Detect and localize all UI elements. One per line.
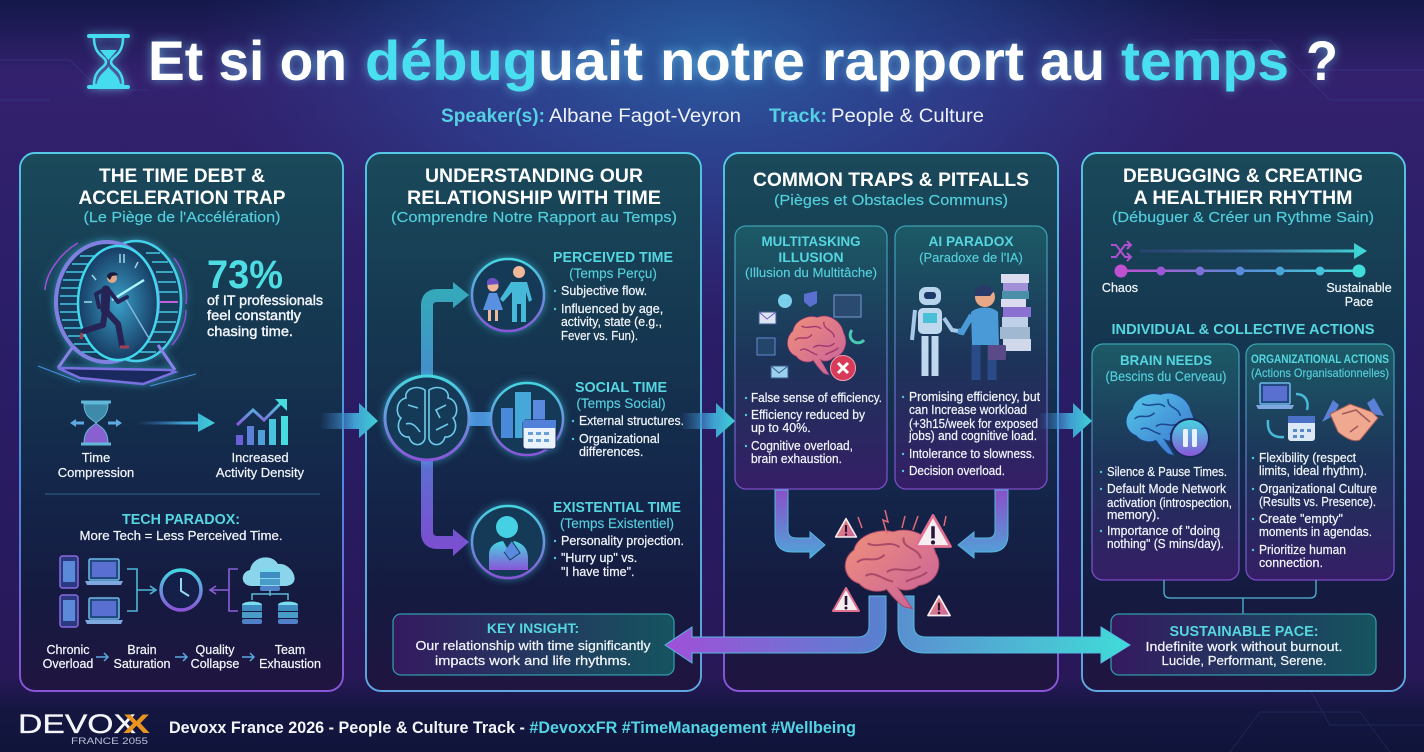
panel: debugging — [1082, 153, 1405, 691]
footer — [18, 709, 856, 747]
bullets: limits, ideal rhythm). — [1259, 464, 1367, 478]
process chain: Collapse — [191, 657, 239, 671]
icon: child and adult — [472, 259, 544, 331]
speaker line: People & Culture — [831, 106, 984, 127]
title: uait — [538, 29, 643, 92]
bullets: Flexibility (respect — [1259, 451, 1357, 465]
heading: (Le Piège de l'Accélération) — [84, 209, 281, 226]
speaker line — [441, 106, 984, 127]
bullets: nothing" (S mins/day). — [1107, 537, 1224, 551]
icon: brain circle — [385, 376, 469, 460]
text: perceived time — [553, 249, 673, 343]
icon: city calendar — [491, 383, 563, 455]
bullets: (Results vs. Presence). — [1259, 495, 1376, 509]
bullets: Organizational Culture — [1259, 482, 1377, 496]
text: existential time — [553, 499, 684, 579]
arrow: compression to density — [137, 413, 215, 432]
speaker line: Track: — [769, 106, 827, 127]
title: Et si on — [148, 29, 347, 92]
text: existential time: (Temps Existentiel) — [560, 516, 674, 531]
bullets: Create "empty" — [1259, 512, 1343, 526]
card heading — [1251, 352, 1389, 380]
stat 73%: 73% — [207, 253, 283, 297]
bullets: Silence & Pause Times. — [1107, 465, 1227, 479]
title: rapport — [822, 29, 1024, 92]
title: au — [1040, 29, 1105, 92]
text: social time: SOCIAL TIME — [575, 379, 667, 396]
panel: time debt — [20, 0, 343, 691]
icon: overloaded brain — [757, 291, 864, 380]
caption: activity density: Activity Density — [216, 465, 305, 480]
bullets — [902, 390, 1041, 478]
text: existential time: "Hurry up" vs. — [561, 551, 637, 565]
timeline labels: Pace — [1345, 295, 1373, 309]
timeline labels: Sustainable — [1326, 281, 1392, 295]
heading — [391, 166, 677, 226]
card heading: (Bescins du Cerveau) — [1106, 369, 1226, 384]
arrow: cloud to clock — [210, 569, 238, 611]
heading: RELATIONSHIP WITH TIME — [407, 188, 661, 209]
card heading — [1106, 352, 1226, 384]
callout: sustainable pace: Lucide, Performant, Serene. — [1162, 653, 1326, 668]
timeline labels: Chaos — [1102, 281, 1138, 295]
text: perceived time: Subjective flow. — [561, 284, 647, 298]
process chain: Quality — [196, 643, 235, 657]
stat 73%: feel constantly — [207, 308, 301, 323]
card heading: (Actions Organisationnelles) — [1251, 366, 1389, 380]
bullets: Importance of "doing — [1107, 524, 1220, 538]
tech paradox heading — [80, 511, 282, 543]
arrow: panel 1 to 2 — [320, 403, 378, 438]
arrow: devices to clock — [127, 569, 156, 611]
text: perceived time: Influenced by age, — [561, 302, 663, 316]
process chain: Chronic — [46, 643, 90, 657]
text: perceived time: Fever vs. Fun). — [561, 329, 638, 343]
timeline — [1114, 264, 1366, 278]
arrows: brain to time types — [421, 282, 492, 556]
heading — [78, 166, 286, 226]
callout: key insight: impacts work and life rhythms. — [435, 653, 631, 668]
process chain: Overload — [43, 657, 93, 671]
icon: devices — [60, 556, 123, 627]
bullets: moments in agendas. — [1259, 525, 1372, 539]
icon: rising bar chart — [236, 399, 288, 445]
text: perceived time: PERCEIVED TIME — [553, 249, 673, 266]
card heading: BRAIN NEEDS — [1120, 352, 1212, 368]
panel: understanding time — [366, 153, 701, 691]
bullets: False sense of efficiency. — [751, 391, 882, 405]
card heading — [745, 233, 877, 280]
callout: sustainable pace: SUSTAINABLE PACE: — [1170, 624, 1318, 640]
logo: devoxx: X — [123, 709, 150, 739]
bullets: Default Mode Network — [1107, 482, 1227, 496]
heading — [753, 170, 1029, 209]
heading: COMMON TRAPS & PITFALLS — [753, 170, 1029, 191]
arrow: chaos to pace — [1140, 243, 1367, 259]
heading: ACCELERATION TRAP — [78, 188, 286, 209]
title: notre — [660, 29, 805, 92]
heading: DEBUGGING & CREATING — [1123, 166, 1363, 187]
card heading: ORGANIZATIONAL ACTIONS — [1251, 352, 1389, 366]
heading: (Pièges et Obstacles Communs) — [774, 192, 1008, 209]
bullets: brain exhaustion. — [751, 452, 842, 466]
card: multitasking — [735, 226, 887, 489]
tech paradox heading: More Tech = Less Perceived Time. — [80, 528, 282, 543]
caption: time compression: Compression — [58, 465, 134, 480]
process chain: Team — [275, 643, 305, 657]
callout: sustainable pace — [1111, 614, 1376, 675]
text: existential time: "I have time". — [561, 565, 634, 579]
title: temps — [1121, 29, 1289, 92]
bullets: Cognitive overload, — [751, 439, 853, 453]
process chain: Brain — [127, 643, 157, 657]
stat 73%: of IT professionals — [207, 293, 323, 308]
card: brain needs — [1092, 344, 1239, 580]
heading: (Comprendre Notre Rapport au Temps) — [391, 209, 677, 226]
caption: time compression — [58, 450, 134, 480]
text: social time: External structures. — [579, 414, 684, 428]
card heading — [919, 233, 1023, 265]
heading — [1112, 166, 1374, 226]
text: social time: (Temps Social) — [576, 396, 666, 411]
icon: stressed brain with warnings — [833, 510, 951, 616]
process chain — [43, 643, 321, 671]
card heading: AI PARADOX — [928, 233, 1014, 249]
arrow: panel 3 to 4 — [1038, 403, 1092, 438]
callout: key insight: Our relationship with time significantly — [416, 638, 651, 653]
callout: sustainable pace: Indefinite work without burnout. — [1146, 639, 1342, 654]
card heading: MULTITASKING — [762, 233, 861, 249]
heading: THE TIME DEBT & — [99, 166, 265, 187]
callout: key insight — [393, 614, 674, 675]
bullets: connection. — [1259, 556, 1323, 570]
heading: UNDERSTANDING OUR — [425, 166, 643, 187]
caption: activity density: Increased — [231, 450, 289, 465]
bullets: Efficiency reduced by — [751, 408, 866, 422]
bullets — [1100, 465, 1232, 551]
panel: traps — [724, 153, 1058, 691]
bullets: Prioritize human — [1259, 543, 1346, 557]
timeline labels — [1102, 281, 1392, 309]
bullets: Promising efficiency, but — [909, 390, 1041, 404]
icon: cloud databases — [242, 557, 298, 624]
icon: handshake — [1322, 398, 1384, 441]
text: social time: Organizational — [579, 432, 660, 446]
icon: shuffle — [1111, 241, 1131, 261]
logo: devoxx: DEVOX — [18, 709, 136, 739]
icon: robot, person, papers — [912, 274, 1031, 380]
card: ai paradox — [895, 226, 1047, 489]
text: social time — [572, 379, 684, 459]
connector bracket — [1164, 580, 1316, 614]
bullets: jobs) and cognitive load. — [908, 429, 1037, 443]
stat 73%: chasing time. — [207, 324, 293, 339]
icon: thinking person — [472, 506, 544, 578]
logo: devoxx: FRANCE 2055 — [71, 736, 148, 747]
title: débug — [365, 29, 538, 92]
bullets — [1252, 451, 1377, 570]
callout: key insight: KEY INSIGHT: — [487, 620, 579, 636]
arrow: panel 2 to 3 — [680, 403, 735, 438]
text: existential time: Personality projection. — [561, 534, 684, 548]
card heading: ILLUSION — [778, 249, 844, 265]
title: ? — [1306, 29, 1338, 92]
text: social time: differences. — [579, 445, 643, 459]
caption: activity density — [216, 450, 305, 480]
bullets: Decision overload. — [909, 464, 1005, 478]
arrows: cards into brain — [775, 490, 1008, 558]
caption: time compression: Time — [82, 450, 110, 465]
icon: laptop calendar — [1256, 383, 1315, 441]
card heading: (Illusion du Multitâche) — [745, 265, 877, 280]
subheading: actions: INDIVIDUAL & COLLECTIVE ACTIONS — [1112, 321, 1374, 338]
arrows: brain to outcomes — [665, 596, 1130, 663]
card: organizational actions — [1246, 344, 1394, 580]
speaker line: Speaker(s): — [441, 106, 545, 127]
header — [89, 29, 1338, 127]
process chain: Exhaustion — [259, 657, 321, 671]
text: perceived time: (Temps Perçu) — [569, 266, 657, 281]
heading: (Débuguer & Créer un Rythme Sain) — [1112, 209, 1374, 226]
icon: hourglass — [89, 36, 128, 87]
card heading: (Paradoxe de l'IA) — [919, 250, 1023, 265]
stat 73% — [207, 253, 323, 339]
bullets: activation (introspection, — [1107, 496, 1232, 510]
bullets: up to 40%. — [751, 421, 811, 435]
bullets: (+3h15/week for exposed — [909, 417, 1038, 431]
icon: clock — [161, 570, 201, 610]
title — [148, 29, 1338, 92]
tech paradox heading: TECH PARADOX: — [122, 511, 240, 528]
footer text: Devoxx France 2026 - People & Culture Track - #DevoxxFR #TimeManagement #Wellbeing — [169, 719, 856, 737]
icon: brain pause — [1126, 393, 1209, 457]
icon: hourglass compression — [70, 402, 122, 444]
heading: A HEALTHIER RHYTHM — [1134, 188, 1352, 209]
speaker line: Albane Fagot-Veyron — [549, 106, 741, 127]
bullets — [745, 391, 882, 466]
bullets: can Increase workload — [909, 403, 1027, 417]
process chain: Saturation — [114, 657, 171, 671]
icon: hamster wheel runner — [30, 0, 196, 386]
bullets: Intolerance to slowness. — [909, 447, 1035, 461]
logo: devoxx — [18, 709, 150, 747]
bullets: memory). — [1107, 508, 1160, 522]
text: perceived time: activity, state (e.g., — [561, 315, 662, 329]
text: existential time: EXISTENTIAL TIME — [553, 499, 681, 516]
